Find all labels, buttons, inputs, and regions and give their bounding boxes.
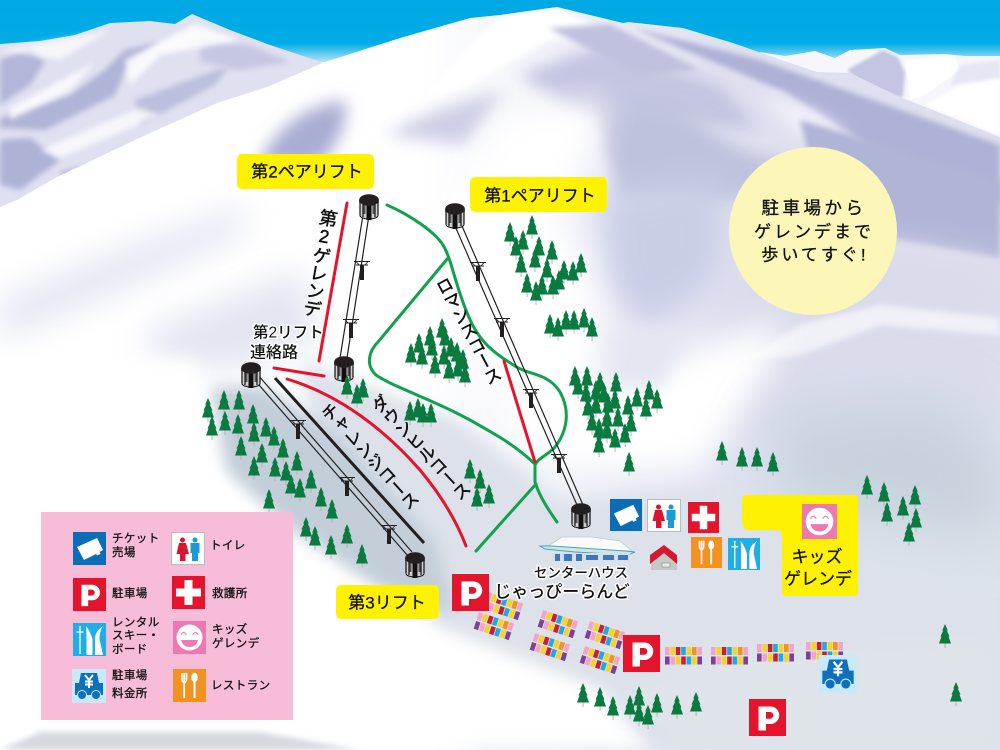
green branch	[369, 258, 535, 464]
legend: レストラン: レストラン	[211, 680, 270, 692]
legend: 駐車場料金所: 料金所	[112, 686, 148, 700]
challenge course line	[275, 378, 424, 543]
legend: チケット売場: チケット	[112, 532, 160, 545]
ロマンスコース route	[387, 205, 566, 522]
legend: キッズゲレンデ: ゲレンデ	[212, 636, 260, 650]
legend: 駐車場料金所: 駐車場	[112, 668, 148, 682]
gondola terminals	[241, 194, 591, 578]
label: 第2リフト連絡路: 第2リフト	[253, 324, 324, 342]
第2ゲレンデ line	[319, 203, 347, 361]
legend: レンタルスキー・ボード: スキー・	[112, 630, 160, 642]
kids area yellow panel: ゲレンデ	[784, 568, 852, 588]
legend: レンタルスキー・ボード	[73, 616, 160, 656]
restaurant house icon	[650, 545, 677, 570]
far left mountain	[0, 14, 330, 215]
legend: 駐車場料金所	[72, 668, 148, 703]
parking icons	[452, 574, 786, 736]
callout circle: ゲレンデまで	[754, 222, 874, 242]
legend: 救護所	[172, 576, 248, 609]
label: 第2ペアリフト	[237, 154, 374, 189]
label: 第1ペアリフト	[470, 177, 607, 212]
legend: チケット売場: 売場	[112, 546, 136, 559]
legend: キッズゲレンデ	[173, 621, 260, 654]
label: 第3リフト	[336, 585, 439, 619]
label: 第2リフト連絡路: 連絡路	[250, 344, 298, 362]
label: ダウンヒルコース: ダウンヒルコース	[366, 392, 473, 505]
legend: 駐車場: 駐車場	[112, 586, 148, 600]
facility icons near center house	[610, 499, 760, 570]
far right mountains	[760, 48, 1000, 170]
legend: トイレ	[172, 532, 246, 564]
callout circle: 歩いてすぐ!	[761, 246, 869, 264]
legend: トイレ: トイレ	[210, 540, 246, 552]
center house label: じゃっぴーらんど	[494, 582, 630, 602]
label: 第1ペアリフト: 第1ペアリフト	[484, 186, 596, 206]
center house building	[540, 537, 635, 561]
kids area yellow panel: キッズ	[792, 548, 842, 566]
label: 第2ペアリフト: 第2ペアリフト	[251, 162, 363, 182]
callout circle: 駐車場から	[762, 198, 866, 218]
legend: レストラン	[173, 669, 270, 702]
panel: legend	[41, 512, 293, 720]
lift cables	[252, 215, 583, 556]
downhill line	[287, 379, 466, 546]
connector line	[274, 368, 324, 376]
label: チャレンジコース: チャレンジコース	[316, 401, 421, 514]
trees	[202, 215, 962, 729]
kids area yellow panel	[742, 495, 858, 596]
lift towers	[290, 262, 567, 544]
legend: 駐車場	[73, 578, 148, 611]
label: 第2ゲレンデ: 第2ゲレンデ	[300, 207, 339, 319]
green ski courses	[369, 205, 566, 551]
sky	[0, 0, 1000, 62]
parking lots	[474, 592, 843, 674]
legend: キッズゲレンデ: キッズ	[212, 622, 248, 636]
red ski courses	[274, 203, 535, 546]
label: ロマンスコース: ロマンスコース	[431, 275, 503, 389]
label: 第3リフト: 第3リフト	[348, 594, 426, 612]
label: 第2リフト連絡路	[250, 324, 324, 362]
legend: レンタルスキー・ボード: レンタル	[112, 616, 160, 629]
center house label: センターハウス	[534, 566, 628, 580]
legend: 救護所: 救護所	[212, 586, 248, 600]
legend: レンタルスキー・ボード: ボード	[112, 643, 148, 656]
parking toll icon	[819, 655, 857, 693]
callout circle	[729, 147, 897, 315]
romance red line	[504, 361, 535, 462]
green lower branch	[476, 484, 536, 551]
center house label	[494, 566, 630, 602]
legend: チケット売場	[73, 532, 160, 565]
